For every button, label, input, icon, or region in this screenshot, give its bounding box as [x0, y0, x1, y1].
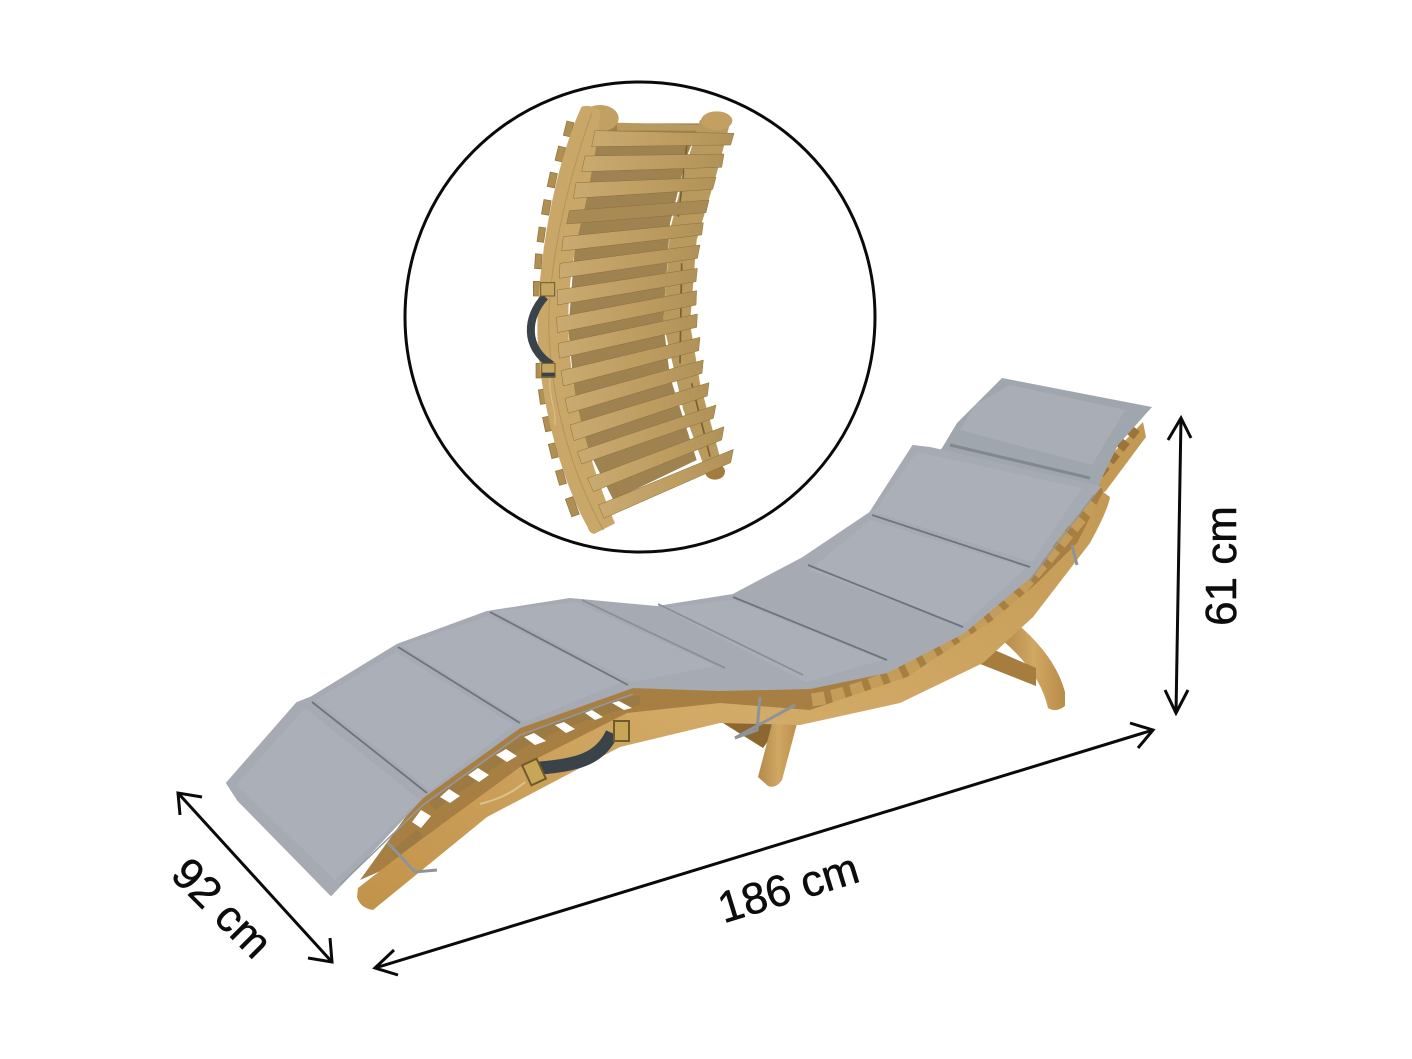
- gaps between slats: [412, 701, 632, 828]
- handle on main rail: [480, 721, 629, 804]
- arrow: width: [178, 793, 332, 962]
- rear crossbar: [970, 645, 1036, 686]
- slat blocks left: [395, 700, 640, 855]
- main curved rail: [357, 492, 1110, 910]
- folded slats: [557, 131, 734, 518]
- top knobs: [701, 111, 732, 130]
- cushion creases: [312, 515, 1030, 793]
- label: width: 92 cm: [162, 849, 281, 968]
- front leg: [758, 716, 799, 787]
- cushion segment panels: [236, 452, 1082, 880]
- label: height: 61 cm: [1197, 506, 1246, 626]
- folded lounger frame and slats: [531, 105, 734, 534]
- rear rails: [663, 120, 730, 473]
- main lounger with cushion: [227, 378, 1152, 910]
- cushion flange folds: [340, 495, 1094, 885]
- slat band: [360, 485, 1108, 880]
- arrow: height: [1165, 418, 1191, 713]
- left curved rail: [537, 106, 615, 534]
- carry handle: [531, 283, 555, 425]
- circle outline: [405, 82, 875, 552]
- back cushion: [930, 378, 1152, 490]
- rear interior shadow: [568, 123, 700, 500]
- inset circle: folded lounger: [405, 82, 875, 552]
- label: length: 186 cm: [712, 844, 865, 933]
- rear rail and slats: [1085, 422, 1146, 492]
- rear foot: [705, 464, 725, 480]
- side tabs: [533, 121, 579, 517]
- arrow: length: [375, 723, 1153, 975]
- rear leg: [1002, 622, 1065, 710]
- ties: [388, 545, 1077, 872]
- front crossbar: [715, 718, 785, 748]
- main cushion: [227, 446, 1100, 895]
- slat blocks right: [812, 500, 1096, 700]
